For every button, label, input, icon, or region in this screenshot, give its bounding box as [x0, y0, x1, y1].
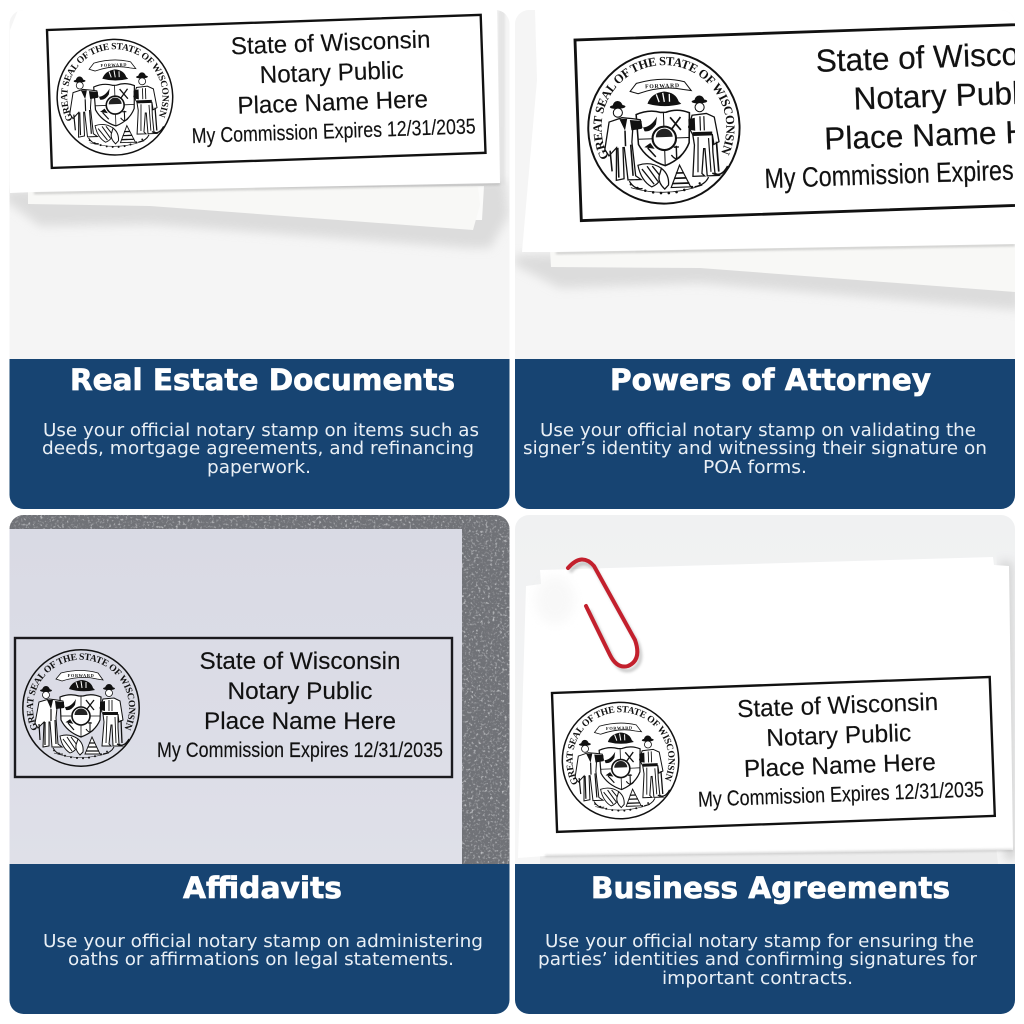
caption background	[10, 864, 510, 1014]
description: signer’s identity and witnessing their signature on	[523, 438, 987, 459]
paper lower edge	[545, 850, 1013, 856]
caption background	[515, 359, 1015, 509]
stamp text: Notary Public	[766, 720, 912, 752]
top paper	[522, 10, 1015, 252]
stamp text	[157, 648, 443, 762]
stamp border	[552, 677, 995, 832]
stamp text: My Commission Expires 12/31/2035	[191, 114, 476, 148]
caption background	[10, 359, 510, 509]
seal: FORWARD	[68, 673, 94, 678]
granite background	[10, 515, 510, 865]
stamp border	[15, 638, 452, 777]
description: parties’ identities and confirming signatures for	[538, 949, 978, 970]
paper stack	[518, 557, 1013, 858]
seal	[22, 649, 140, 767]
photo background	[515, 515, 1015, 865]
notary stamp	[550, 676, 996, 834]
stamp text	[188, 25, 476, 148]
paper worn patch	[535, 576, 575, 624]
paper	[10, 529, 462, 865]
description: important contracts.	[662, 968, 853, 989]
paper shadow	[515, 245, 1020, 310]
granite light speckle	[10, 515, 510, 865]
description	[524, 422, 986, 474]
lower paper	[550, 244, 1015, 292]
seal: GREAT SEAL OF THE STATE OF WISCONSIN	[593, 56, 735, 159]
stamp text: Notary Public	[259, 57, 404, 89]
notary stamp	[46, 14, 487, 170]
stamp text	[766, 43, 1015, 194]
top paper shadow edge	[34, 184, 500, 193]
description: Use your official notary stamp on administering	[43, 931, 483, 952]
stamp text: Place Name Here	[743, 749, 936, 783]
description	[42, 420, 479, 478]
description: Use your official notary stamp on validating the	[540, 420, 976, 441]
seal: GREAT SEAL OF THE STATE OF WISCONSIN	[26, 653, 136, 731]
right side shadow	[498, 10, 505, 185]
stamp text: Notary Public	[228, 678, 372, 705]
description: deeds, mortgage agreements, and refinancing	[42, 438, 474, 459]
lower paper	[28, 186, 480, 230]
top paper	[10, 10, 500, 193]
icon: red paperclip	[568, 559, 637, 667]
stamp text: My Commission Expires 12/31/2035	[157, 738, 443, 762]
photo background	[515, 10, 1015, 360]
heading: Business Agreements	[591, 871, 950, 905]
seal: GREAT SEAL OF THE STATE OF WISCONSIN	[60, 42, 169, 121]
heading: Real Estate Documents	[70, 363, 455, 397]
description: paperwork.	[207, 457, 311, 478]
heading: Affidavits	[183, 871, 342, 905]
stamp text: State of Wisconsin	[200, 648, 400, 675]
panel: Business Agreements	[515, 515, 1015, 1014]
stamp text	[694, 687, 984, 812]
notary stamp	[574, 23, 1015, 222]
description: Use your official notary stamp for ensuring the	[545, 931, 974, 952]
notary stamp	[14, 636, 454, 778]
top paper shadow edge	[556, 245, 1015, 253]
photo background	[10, 10, 510, 360]
paper shadow	[5, 180, 509, 248]
seal: GREAT SEAL OF THE STATE OF WISCONSIN	[566, 706, 675, 784]
paper sliver	[476, 186, 484, 220]
description: oaths or affirmations on legal statements.	[68, 949, 454, 970]
stamp border	[47, 15, 485, 168]
seal: FORWARD	[606, 725, 633, 731]
stamp text: State of Wisconsin	[230, 26, 431, 60]
heading: Powers of Attorney	[610, 363, 931, 397]
paper shadow	[1000, 562, 1016, 860]
description	[44, 934, 482, 968]
seal	[587, 51, 741, 205]
description: Use your official notary stamp on items such as	[43, 420, 479, 441]
lower paper	[540, 845, 998, 864]
seal	[562, 702, 680, 820]
icon: paperclip shadow	[570, 563, 640, 671]
seal: FORWARD	[645, 83, 680, 90]
panel: Powers of Attorney	[515, 10, 1015, 509]
stamp text: Place Name Here	[237, 86, 428, 120]
stamp text: Place Name Here	[204, 708, 396, 735]
panel: Real Estate Documents	[10, 10, 510, 509]
stamp border	[575, 20, 1024, 221]
panel: Affidavits	[10, 515, 510, 1014]
seal	[56, 38, 174, 156]
granite dark speckle	[509, 526, 510, 527]
description: POA forms.	[703, 457, 807, 478]
seal: FORWARD	[100, 62, 127, 68]
caption background	[515, 864, 1015, 1014]
stamp text: State of Wisconsin	[737, 689, 939, 723]
description	[538, 931, 978, 989]
